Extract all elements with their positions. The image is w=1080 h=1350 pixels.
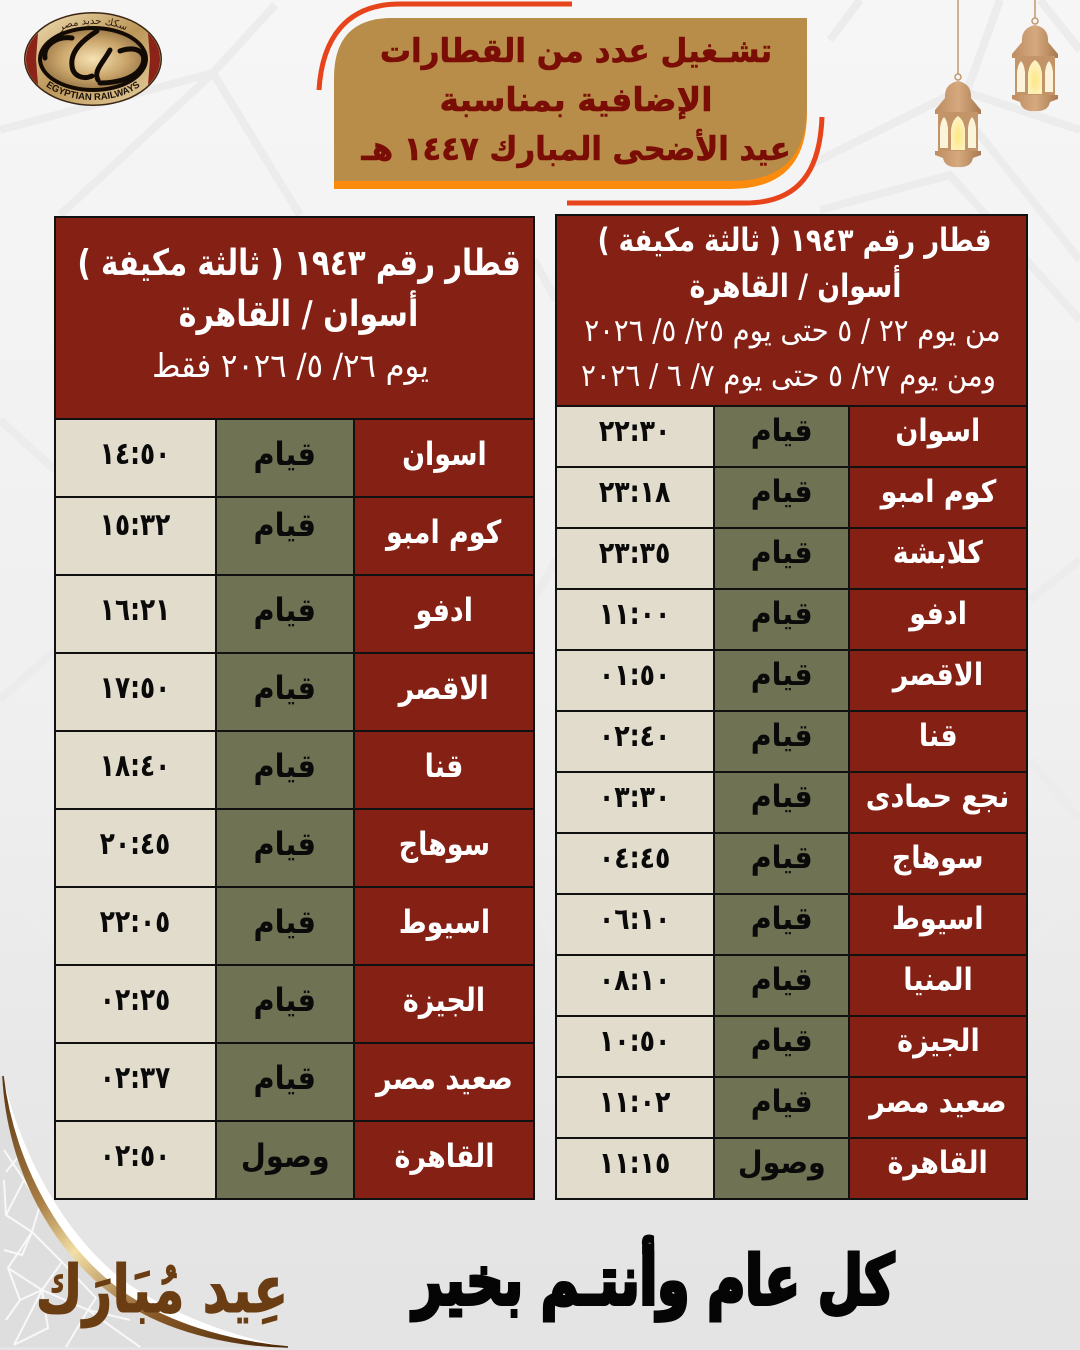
icon: lantern left xyxy=(935,0,981,168)
row: Asyut: اسيوط xyxy=(398,902,490,940)
right table header: أسوان / القاهرة xyxy=(690,267,901,305)
row: Aswan: ٢٢:٣٠ xyxy=(599,414,671,448)
row: Nag Hammadi: نجع حمادى xyxy=(866,779,1010,815)
row: Asyut xyxy=(557,893,1026,954)
row: Qena: قنا xyxy=(919,718,957,754)
row: Cairo: القاهرة xyxy=(888,1145,988,1181)
icon: lantern right xyxy=(1012,0,1058,112)
row: Saeed Misr xyxy=(56,1042,533,1120)
banner heading: تشـغيل عدد من القطارات xyxy=(380,31,772,70)
logo: Egyptian Railways emblem: سكك حديد مصر xyxy=(60,18,126,32)
banner heading: الإضافية بمناسبة xyxy=(439,80,713,119)
row: Giza xyxy=(56,964,533,1042)
row: Cairo: ١١:١٥ xyxy=(599,1146,671,1180)
logo: Egyptian Railways emblem: EGYPTIAN RAILWAYS xyxy=(46,81,140,100)
row: Giza: ١٠:٥٠ xyxy=(599,1024,671,1058)
row: Kom Ombo: ٢٣:١٨ xyxy=(599,474,671,510)
row: Giza: قيام xyxy=(254,980,316,1018)
row: Kalabsha: ٢٣:٣٥ xyxy=(599,536,671,570)
row: Luxor: ١٧:٥٠ xyxy=(100,670,171,706)
closing greeting: كل عام وأنتـم بخير xyxy=(413,1242,895,1320)
row: Giza: قيام xyxy=(751,1023,812,1059)
row: Asyut: ٠٦:١٠ xyxy=(599,902,671,936)
gold swoosh xyxy=(3,1076,288,1347)
row: Giza: الجيزة xyxy=(897,1023,979,1059)
right table header xyxy=(557,216,1026,405)
row: Aswan: قيام xyxy=(751,413,812,449)
right table header: ومن يوم ٢٧/ ٥ حتى يوم ٧/ ٦ / ٢٠٢٦ xyxy=(581,358,996,394)
row: Edfu: قيام xyxy=(751,596,812,632)
row: Saeed Misr: ٠٢:٣٧ xyxy=(100,1060,171,1096)
row: Luxor: الاقصر xyxy=(399,668,489,706)
row: Kom Ombo xyxy=(56,496,533,574)
row: Sohag: ٠٤:٤٥ xyxy=(599,840,671,876)
row: Qena xyxy=(56,730,533,808)
row: Saeed Misr: صعيد مصر xyxy=(376,1058,512,1096)
row: Sohag: سوهاج xyxy=(892,840,984,876)
row: Luxor xyxy=(56,652,533,730)
row: Nag Hammadi: قيام xyxy=(751,779,812,815)
row: Nag Hammadi: ٠٣:٣٠ xyxy=(599,780,671,814)
Eid Mubarak calligraphy: عِيد مُبَارَك xyxy=(36,1251,288,1328)
row: Luxor: قيام xyxy=(751,657,812,693)
row: Sohag xyxy=(56,808,533,886)
row: Luxor: قيام xyxy=(254,668,316,706)
row: Asyut xyxy=(56,886,533,964)
row: Kom Ombo: قيام xyxy=(751,474,812,510)
row: Sohag: سوهاج xyxy=(398,824,490,862)
row: Saeed Misr: ١١:٠٢ xyxy=(599,1084,671,1120)
row: Qena: قيام xyxy=(751,718,812,754)
row: Cairo: وصول xyxy=(241,1136,329,1174)
row: Aswan xyxy=(56,418,533,496)
corner ornament with Eid calligraphy xyxy=(0,1076,288,1348)
row: Edfu: ١٦:٢١ xyxy=(100,592,171,628)
row: Minya: المنيا xyxy=(903,962,973,998)
row: Cairo xyxy=(557,1137,1026,1198)
row: Giza: الجيزة xyxy=(403,980,485,1018)
row: Kom Ombo xyxy=(557,466,1026,527)
row: Qena: ٠٢:٤٠ xyxy=(599,718,671,754)
banner heading: عيد الأضحى المبارك ١٤٤٧ هـ xyxy=(361,129,791,168)
row: Qena xyxy=(557,710,1026,771)
row: Aswan: قيام xyxy=(254,434,316,472)
title banner xyxy=(316,2,824,206)
row: Cairo: ٠٢:٥٠ xyxy=(100,1138,171,1174)
row: Minya: قيام xyxy=(751,962,812,998)
row: Asyut: قيام xyxy=(254,902,316,940)
row: Kalabsha: كلابشة xyxy=(893,535,983,571)
row: Cairo: وصول xyxy=(738,1145,825,1181)
logo: Egyptian Railways emblem xyxy=(24,12,162,106)
row: Nag Hammadi xyxy=(557,771,1026,832)
row: Edfu: قيام xyxy=(254,590,316,628)
left table header: قطار رقم ١٩٤٣ ( ثالثة مكيفة ) xyxy=(77,243,521,284)
row: Luxor: الاقصر xyxy=(893,657,983,693)
row: Sohag: ٢٠:٤٥ xyxy=(100,826,171,862)
row: Kom Ombo: قيام xyxy=(254,506,316,544)
panel: left schedule table xyxy=(54,216,535,1200)
left table header xyxy=(56,218,533,418)
row: Cairo: القاهرة xyxy=(394,1136,494,1174)
row: Aswan: ١٤:٥٠ xyxy=(100,436,171,472)
row: Qena: ١٨:٤٠ xyxy=(100,748,171,784)
left table header: أسوان / القاهرة xyxy=(179,294,418,335)
row: Edfu xyxy=(557,588,1026,649)
banner heading xyxy=(360,31,791,168)
row: Kom Ombo: كوم امبو xyxy=(880,474,996,510)
row: Qena: قنا xyxy=(425,746,463,784)
row: Minya: ٠٨:١٠ xyxy=(599,962,671,998)
row: Saeed Misr xyxy=(557,1076,1026,1137)
row: Saeed Misr: قيام xyxy=(254,1058,316,1096)
row: Minya xyxy=(557,954,1026,1015)
right table header: قطار رقم ١٩٤٣ ( ثالثة مكيفة ) xyxy=(598,221,991,259)
row: Edfu: ادفو xyxy=(415,590,473,628)
row: Kalabsha: قيام xyxy=(751,535,812,571)
row: Sohag: قيام xyxy=(751,840,812,876)
row: Aswan: اسوان xyxy=(896,413,980,449)
right table header: من يوم ٢٢ / ٥ حتى يوم ٢٥/ ٥/ ٢٠٢٦ xyxy=(584,313,1001,349)
row: Qena: قيام xyxy=(254,746,316,784)
row: Kom Ombo: ١٥:٣٢ xyxy=(100,506,171,542)
row: Sohag xyxy=(557,832,1026,893)
left table header: يوم ٢٦/ ٥/ ٢٠٢٦ فقط xyxy=(152,346,429,385)
row: Saeed Misr: صعيد مصر xyxy=(869,1084,1007,1120)
row: Edfu xyxy=(56,574,533,652)
row: Sohag: قيام xyxy=(254,824,316,862)
row: Giza: ٠٢:٢٥ xyxy=(100,982,171,1018)
row: Cairo xyxy=(56,1120,533,1198)
row: Asyut: اسيوط xyxy=(892,901,984,937)
row: Edfu: ١١:٠٠ xyxy=(599,596,671,632)
row: Asyut: ٢٢:٠٥ xyxy=(100,904,171,940)
row: Kalabsha xyxy=(557,527,1026,588)
row: Aswan xyxy=(557,405,1026,466)
row: Luxor: ٠١:٥٠ xyxy=(599,658,671,692)
row: Giza xyxy=(557,1015,1026,1076)
banner shape with arcs xyxy=(316,2,824,206)
row: Saeed Misr: قيام xyxy=(751,1084,812,1120)
row: Kom Ombo: كوم امبو xyxy=(386,512,502,550)
row: Aswan: اسوان xyxy=(402,434,486,472)
panel: right schedule table xyxy=(555,214,1028,1200)
row: Luxor xyxy=(557,649,1026,710)
row: Edfu: ادفو xyxy=(909,596,967,632)
row: Asyut: قيام xyxy=(751,901,812,937)
